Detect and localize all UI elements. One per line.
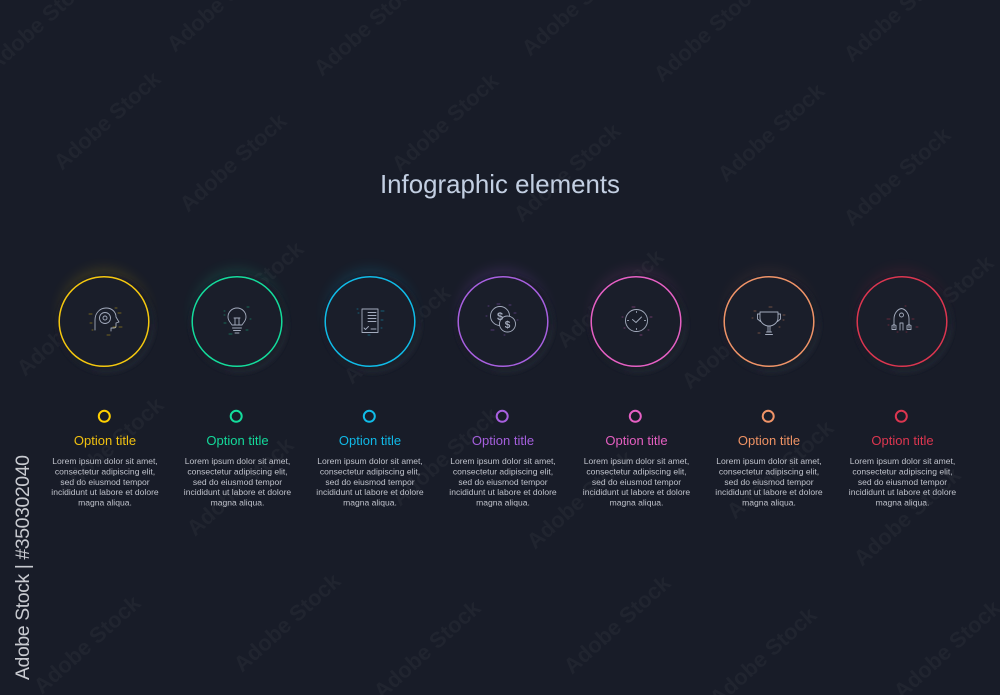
description: incididunt ut labore et dolore bbox=[715, 487, 823, 497]
description: incididunt ut labore et dolore bbox=[849, 487, 956, 497]
neumorphic disc bbox=[189, 268, 289, 374]
description bbox=[184, 456, 291, 508]
description bbox=[316, 456, 424, 508]
marker bbox=[99, 411, 110, 422]
icon: document bbox=[357, 309, 384, 335]
description bbox=[51, 456, 159, 508]
description: consectetur adipiscing elit, bbox=[320, 466, 420, 476]
stock watermarks: Adobe Stock bbox=[882, 250, 999, 359]
step 7: red bbox=[849, 268, 956, 508]
icon: light bulb bbox=[224, 307, 251, 334]
description: sed do eiusmod tempor bbox=[858, 477, 947, 487]
step 6: orange bbox=[715, 268, 823, 508]
stock watermarks: Adobe Stock bbox=[339, 280, 456, 389]
ring bbox=[591, 277, 681, 366]
icon: coins bbox=[486, 304, 518, 335]
stock watermarks: Adobe Stock bbox=[522, 445, 639, 554]
stock watermarks: Adobe Stock bbox=[182, 432, 299, 541]
description: magna aliqua. bbox=[343, 498, 397, 508]
stock watermarks: Adobe Stock bbox=[52, 392, 169, 501]
neumorphic disc bbox=[721, 268, 821, 374]
stock watermarks: Adobe Stock bbox=[12, 272, 129, 381]
stock watermarks: Adobe Stock bbox=[229, 568, 346, 677]
option title: Option title bbox=[738, 433, 800, 448]
stock watermarks: Adobe Stock bbox=[552, 244, 669, 353]
description bbox=[583, 456, 690, 508]
description: magna aliqua. bbox=[211, 498, 264, 508]
option title: Option title bbox=[472, 433, 534, 448]
ring bbox=[857, 277, 947, 366]
neumorphic disc bbox=[455, 268, 555, 374]
step 2: green bbox=[184, 268, 291, 508]
description: magna aliqua. bbox=[742, 498, 796, 508]
icon: clock bbox=[622, 307, 652, 335]
description bbox=[849, 456, 956, 508]
description bbox=[715, 456, 823, 508]
stock watermarks: Adobe Stock bbox=[49, 66, 166, 175]
description: sed do eiusmod tempor bbox=[592, 477, 681, 487]
description: magna aliqua. bbox=[476, 498, 530, 508]
icon: head with gear bbox=[89, 308, 122, 335]
stock watermarks: Adobe Stock bbox=[849, 462, 966, 571]
marker bbox=[630, 411, 641, 422]
ring bbox=[724, 277, 814, 366]
neumorphic disc bbox=[322, 268, 422, 374]
description: sed do eiusmod tempor bbox=[193, 477, 282, 487]
stock watermarks: Adobe Stock bbox=[509, 118, 626, 227]
option title: Option title bbox=[74, 433, 136, 448]
marker bbox=[364, 411, 375, 422]
description: incididunt ut labore et dolore bbox=[449, 487, 557, 497]
step 3: blue bbox=[316, 268, 424, 508]
description bbox=[449, 456, 557, 508]
neumorphic disc bbox=[588, 268, 688, 374]
marker bbox=[231, 411, 242, 422]
step 1: yellow bbox=[51, 268, 159, 508]
description: Lorem ipsum dolor sit amet, bbox=[584, 456, 689, 466]
icon: coins: $ bbox=[497, 311, 503, 323]
description: Lorem ipsum dolor sit amet, bbox=[450, 456, 556, 466]
description: incididunt ut labore et dolore bbox=[51, 487, 159, 497]
description: consectetur adipiscing elit, bbox=[187, 466, 288, 476]
description: Lorem ipsum dolor sit amet, bbox=[317, 456, 423, 466]
marker bbox=[896, 411, 907, 422]
stock watermarks: Adobe Stock bbox=[192, 236, 309, 345]
description: consectetur adipiscing elit, bbox=[586, 466, 687, 476]
marker bbox=[497, 411, 508, 422]
option title: Option title bbox=[605, 433, 668, 448]
description: Lorem ipsum dolor sit amet, bbox=[52, 456, 158, 466]
description: consectetur adipiscing elit, bbox=[55, 466, 155, 476]
icon: rocket bbox=[887, 306, 918, 332]
description: Lorem ipsum dolor sit amet, bbox=[185, 456, 290, 466]
description: sed do eiusmod tempor bbox=[458, 477, 548, 487]
description: sed do eiusmod tempor bbox=[60, 477, 150, 487]
ring bbox=[458, 277, 548, 366]
icon: trophy bbox=[752, 307, 785, 334]
stock watermarks: Adobe Stock bbox=[387, 68, 504, 177]
step 4: purple bbox=[449, 268, 557, 508]
ring bbox=[325, 277, 415, 366]
icon: coins: $ bbox=[505, 320, 511, 331]
description: magna aliqua. bbox=[610, 498, 663, 508]
stock watermarks: Adobe Stock bbox=[175, 108, 292, 217]
description: sed do eiusmod tempor bbox=[325, 477, 415, 487]
step 5: pink bbox=[583, 268, 690, 508]
option title: Option title bbox=[206, 433, 269, 448]
stock watermarks: Adobe Stock bbox=[387, 402, 504, 511]
option title: Option title bbox=[339, 433, 401, 448]
description: incididunt ut labore et dolore bbox=[583, 487, 690, 497]
title: Infographic elements bbox=[380, 169, 620, 199]
description: magna aliqua. bbox=[876, 498, 929, 508]
description: consectetur adipiscing elit, bbox=[453, 466, 553, 476]
marker bbox=[763, 411, 774, 422]
stock watermarks: Adobe Stock bbox=[677, 285, 794, 394]
description: Lorem ipsum dolor sit amet, bbox=[850, 456, 955, 466]
side stock id label: Adobe Stock | #350302040 bbox=[12, 455, 34, 680]
neumorphic disc bbox=[854, 268, 954, 374]
description: Lorem ipsum dolor sit amet, bbox=[716, 456, 822, 466]
ring bbox=[192, 277, 282, 366]
stock watermarks: Adobe Stock bbox=[722, 415, 839, 524]
stock watermarks: Adobe Stock bbox=[839, 122, 956, 231]
description: sed do eiusmod tempor bbox=[724, 477, 814, 487]
description: consectetur adipiscing elit, bbox=[852, 466, 953, 476]
stock watermarks: Adobe Stock bbox=[713, 78, 830, 187]
option title: Option title bbox=[871, 433, 934, 448]
description: consectetur adipiscing elit, bbox=[719, 466, 819, 476]
ring bbox=[59, 277, 149, 366]
description: magna aliqua. bbox=[78, 498, 132, 508]
description: incididunt ut labore et dolore bbox=[316, 487, 424, 497]
description: incididunt ut labore et dolore bbox=[184, 487, 291, 497]
neumorphic disc bbox=[56, 268, 156, 374]
stock watermarks: Adobe Stock bbox=[559, 570, 676, 679]
